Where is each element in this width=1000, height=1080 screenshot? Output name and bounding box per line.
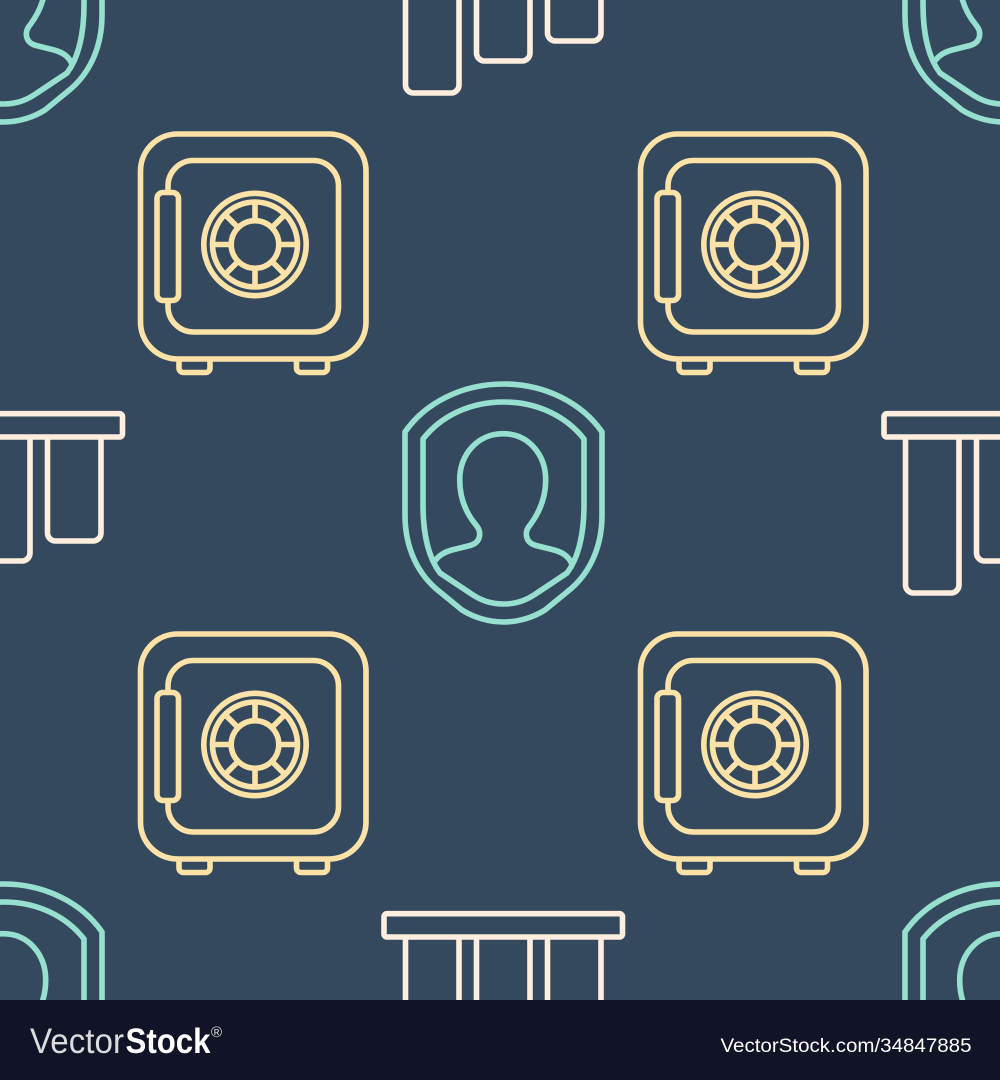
icon: shield corner bottom right [905, 884, 1000, 1080]
icon: safe top right [640, 134, 866, 372]
icon: shield with person center [405, 384, 602, 622]
footer image id text: VectorStock.com/34847885 [720, 1036, 972, 1057]
logo: VectorStock wordmark [30, 1022, 222, 1061]
icon: shield corner bottom left [0, 884, 102, 1080]
icon: safe top left [140, 134, 366, 372]
footer bar [0, 1000, 1000, 1080]
icon: safe bottom left [140, 634, 366, 872]
icon: safe bottom right [640, 634, 866, 872]
logo: VectorStock wordmark: Vector [30, 1022, 124, 1061]
icon: card holder bottom center [384, 914, 622, 1080]
icon: card holder top center [384, 0, 622, 93]
icon: shield corner top right [905, 0, 1000, 122]
icon: card holder left edge [0, 414, 122, 593]
icon: card holder right edge [884, 414, 1000, 593]
logo: VectorStock wordmark: ® [211, 1024, 222, 1041]
logo: VectorStock wordmark: Stock [126, 1022, 211, 1061]
icon: shield corner top left [0, 0, 102, 122]
